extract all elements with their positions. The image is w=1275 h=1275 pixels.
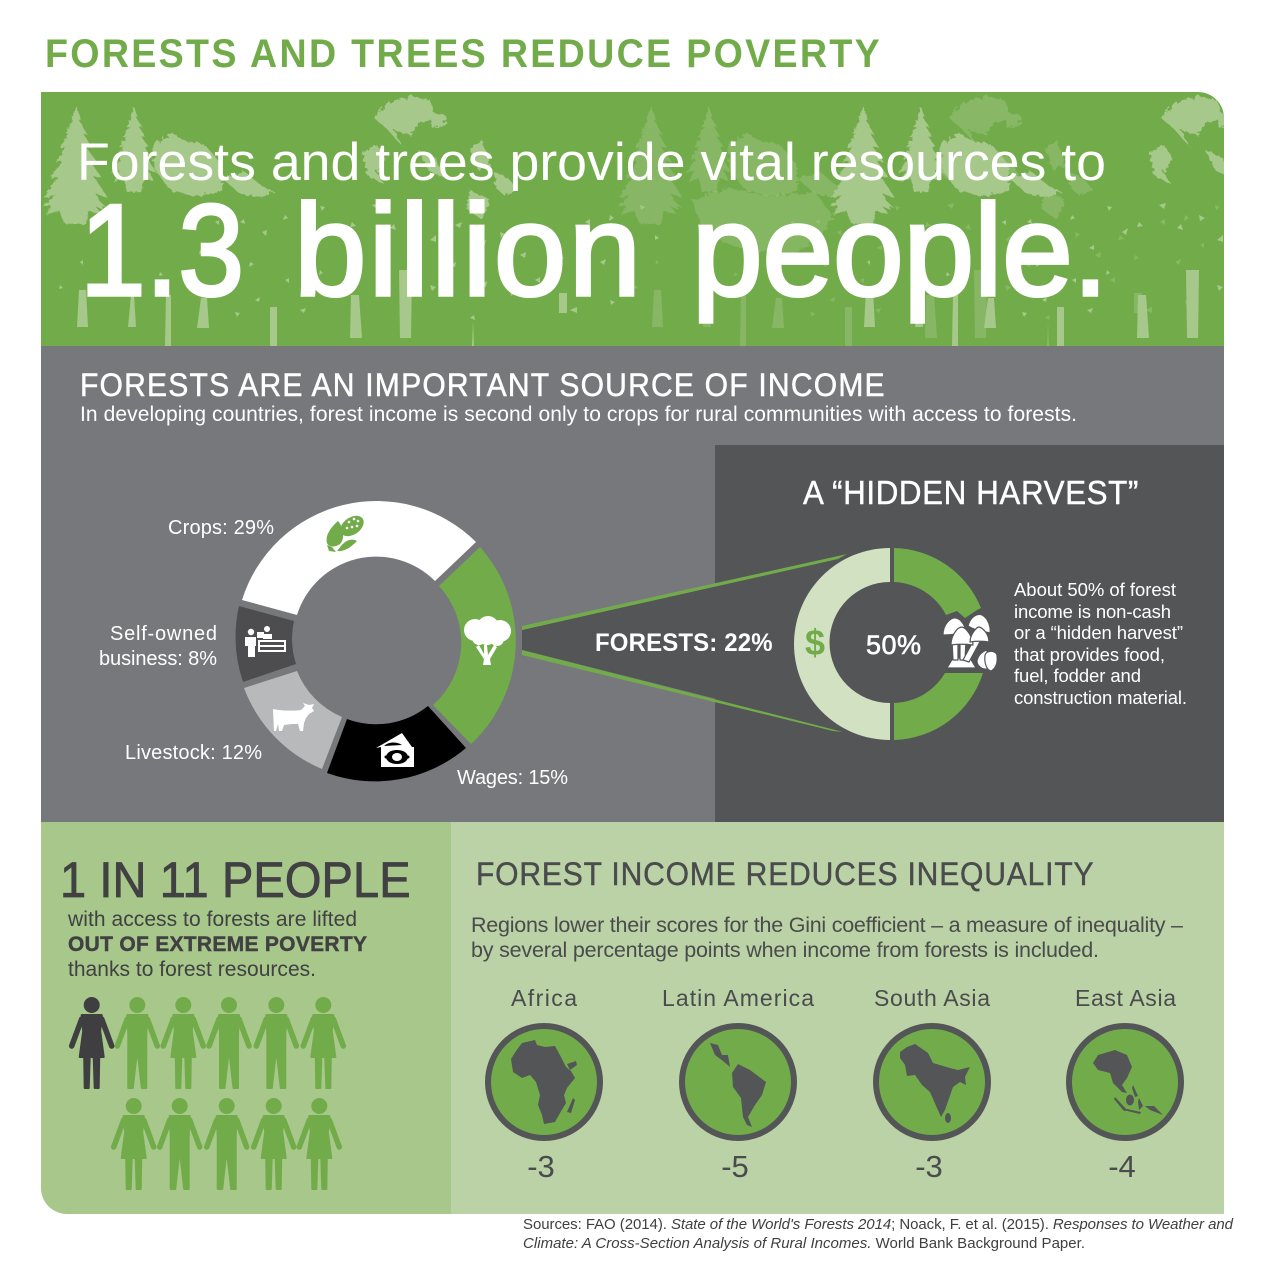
region: Latin America: Latin America <box>662 985 814 1011</box>
icon: shop counter <box>245 626 286 657</box>
banner headline: Forests and trees provide vital resources to <box>77 133 1106 192</box>
label: wages: Wages: 15% <box>457 767 568 789</box>
segment: forests <box>433 547 516 744</box>
region: Africa <box>488 985 600 1184</box>
hidden harvest donut <box>794 548 997 740</box>
label: livestock: Livestock: 12% <box>125 742 262 764</box>
segment: cash income <box>794 548 890 740</box>
donut centre value: 50% <box>866 630 921 660</box>
hidden harvest description <box>1014 579 1187 708</box>
banner big number: billion <box>294 177 641 323</box>
sources note: Climate: A Cross-Section Analysis of Rural Incomes. World Bank Background Paper. <box>523 1235 1085 1252</box>
region: East Asia: -4 <box>1108 1149 1136 1184</box>
icon: tree <box>464 616 511 665</box>
region: East Asia: East Asia <box>1075 985 1176 1011</box>
hidden harvest description: or a “hidden harvest” <box>1014 622 1183 643</box>
segment: self-owned business <box>236 606 296 682</box>
icon: corn <box>327 512 368 552</box>
heading: hidden harvest: A “HIDDEN HARVEST” <box>803 474 1138 511</box>
hidden harvest description: that provides food, <box>1014 644 1165 665</box>
income subheading: In developing countries, forest income is second only to crops for rural communities with access to forests. <box>80 403 1077 426</box>
region: South Asia: -3 <box>915 1149 943 1184</box>
callout wedge linking forests to hidden harvest <box>522 554 848 732</box>
income donut chart <box>236 501 516 781</box>
page title: FORESTS AND TREES REDUCE POVERTY <box>45 32 880 76</box>
income heading: FORESTS ARE AN IMPORTANT SOURCE OF INCOME <box>80 367 885 403</box>
sources note: Sources: FAO (2014). State of the World's Forests 2014; Noack, F. et al. (2015). Responses to Weather and <box>523 1216 1234 1233</box>
icon: banknotes <box>376 733 414 767</box>
inequality description: by several percentage points when income from forests is included. <box>471 938 1099 962</box>
hidden harvest description: income is non-cash <box>1014 601 1171 622</box>
hidden harvest description: fuel, fodder and <box>1014 665 1141 686</box>
icon: dollar sign: $ <box>805 622 825 663</box>
icon: mushrooms and acorn <box>943 614 997 671</box>
panel: hidden harvest <box>715 445 1224 822</box>
hidden harvest description: About 50% of forest <box>1014 579 1176 600</box>
forest silhouette background <box>42 96 1275 346</box>
panel: income section <box>41 346 1224 822</box>
inequality heading: FOREST INCOME REDUCES INEQUALITY <box>476 856 1094 892</box>
label: self-owned business: Self-owned <box>110 623 217 645</box>
segment: livestock <box>244 671 342 769</box>
label: self-owned business <box>99 623 217 670</box>
panel: 1 in 11 people <box>41 822 451 1214</box>
stat description <box>67 908 367 981</box>
segment: crops <box>242 501 476 615</box>
region: East Asia <box>1069 985 1181 1184</box>
region: Latin America: -5 <box>721 1149 749 1184</box>
inequality description <box>471 913 1183 962</box>
stat heading: 1 IN 11 PEOPLE <box>60 853 411 908</box>
pictogram: people <box>72 997 343 1189</box>
segment: wages <box>327 706 466 781</box>
label: forests share: FORESTS: 22% <box>595 630 773 657</box>
inequality description: Regions lower their scores for the Gini coefficient – a measure of inequality – <box>471 913 1183 937</box>
region: Latin America <box>662 985 814 1184</box>
panel: inequality <box>451 822 1224 1214</box>
stat description: OUT OF EXTREME POVERTY <box>68 933 367 956</box>
label: crops: Crops: 29% <box>168 517 274 539</box>
region: Africa: -3 <box>527 1149 555 1184</box>
region: South Asia <box>874 985 990 1184</box>
region: South Asia: South Asia <box>874 985 990 1011</box>
segment: non-cash upper <box>894 548 981 618</box>
stat description: with access to forests are lifted <box>67 908 357 931</box>
hidden harvest description: construction material. <box>1014 687 1187 708</box>
banner big number: people. <box>692 177 1108 323</box>
banner big number <box>80 177 1108 323</box>
banner big number: 1.3 <box>80 177 244 323</box>
panel: green banner <box>41 92 1275 346</box>
label: self-owned business: business: 8% <box>99 648 217 670</box>
segment: non-cash lower <box>894 673 983 740</box>
region: Africa: Africa <box>511 985 577 1011</box>
stat description: thanks to forest resources. <box>68 958 316 981</box>
sources note <box>523 1216 1234 1252</box>
icon: cow <box>273 703 314 731</box>
